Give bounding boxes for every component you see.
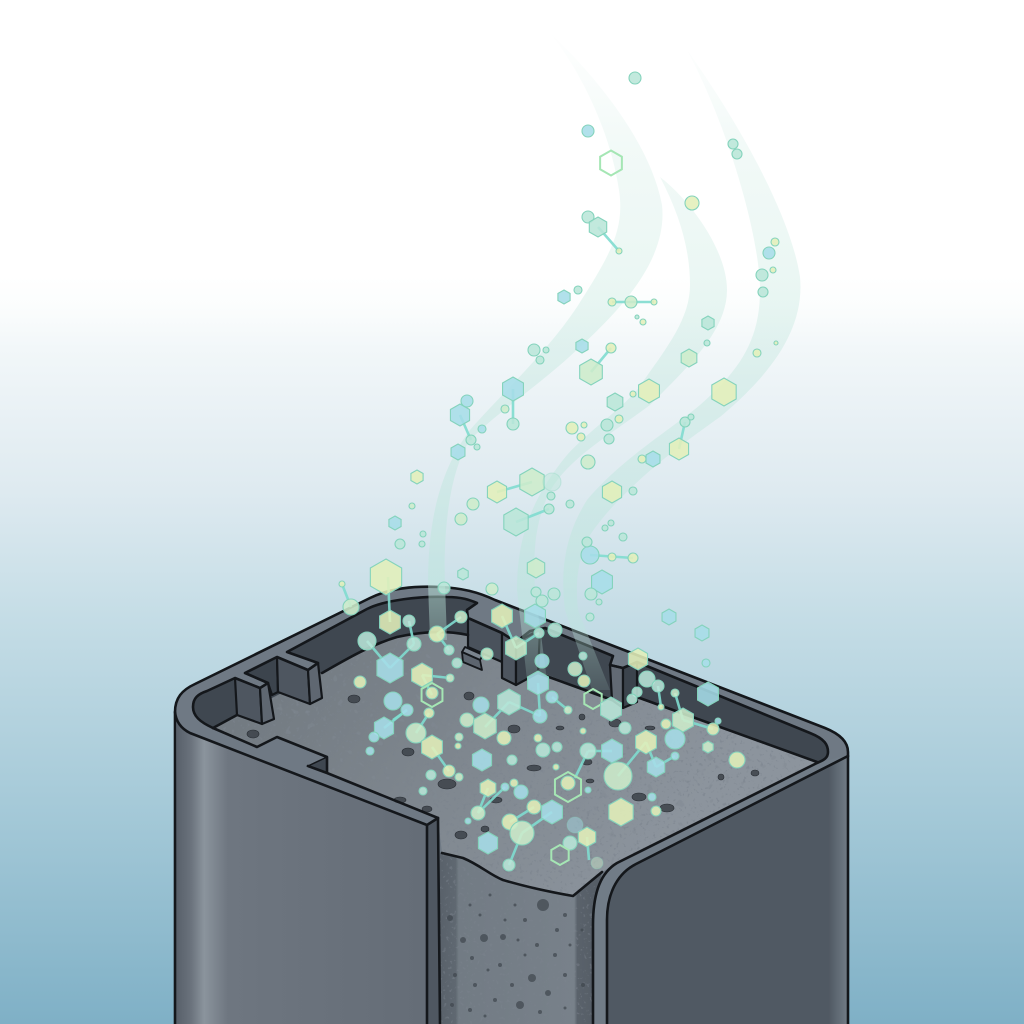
wisp two <box>517 177 727 680</box>
right tab <box>610 662 637 708</box>
front-left panel end cap <box>427 818 440 1024</box>
dark pebbles on the floor <box>247 692 759 839</box>
front-right panel <box>607 756 848 1024</box>
small centre block <box>462 647 483 670</box>
upper particles <box>339 72 779 667</box>
molecule bonds <box>342 227 713 865</box>
box outlines <box>175 587 848 1024</box>
rim silhouette <box>175 587 848 1024</box>
back-left tab two <box>245 657 322 704</box>
foam cross-section <box>440 850 602 1024</box>
back-left tab one <box>193 678 274 727</box>
front-left panel <box>175 717 427 1024</box>
wisp three <box>563 50 800 690</box>
front-right rim strip <box>593 755 848 1024</box>
left floor cluster <box>354 610 515 871</box>
centre wall and tall tab <box>468 618 540 685</box>
vapour wisps <box>428 33 800 690</box>
cartridge box <box>175 587 848 1024</box>
powder floor <box>216 634 815 894</box>
centre and right floor cluster <box>481 604 745 869</box>
ledge notch shadow <box>308 757 327 773</box>
inner walls <box>193 597 828 863</box>
wisp one <box>428 33 663 640</box>
floating molecules and particles <box>339 72 779 871</box>
